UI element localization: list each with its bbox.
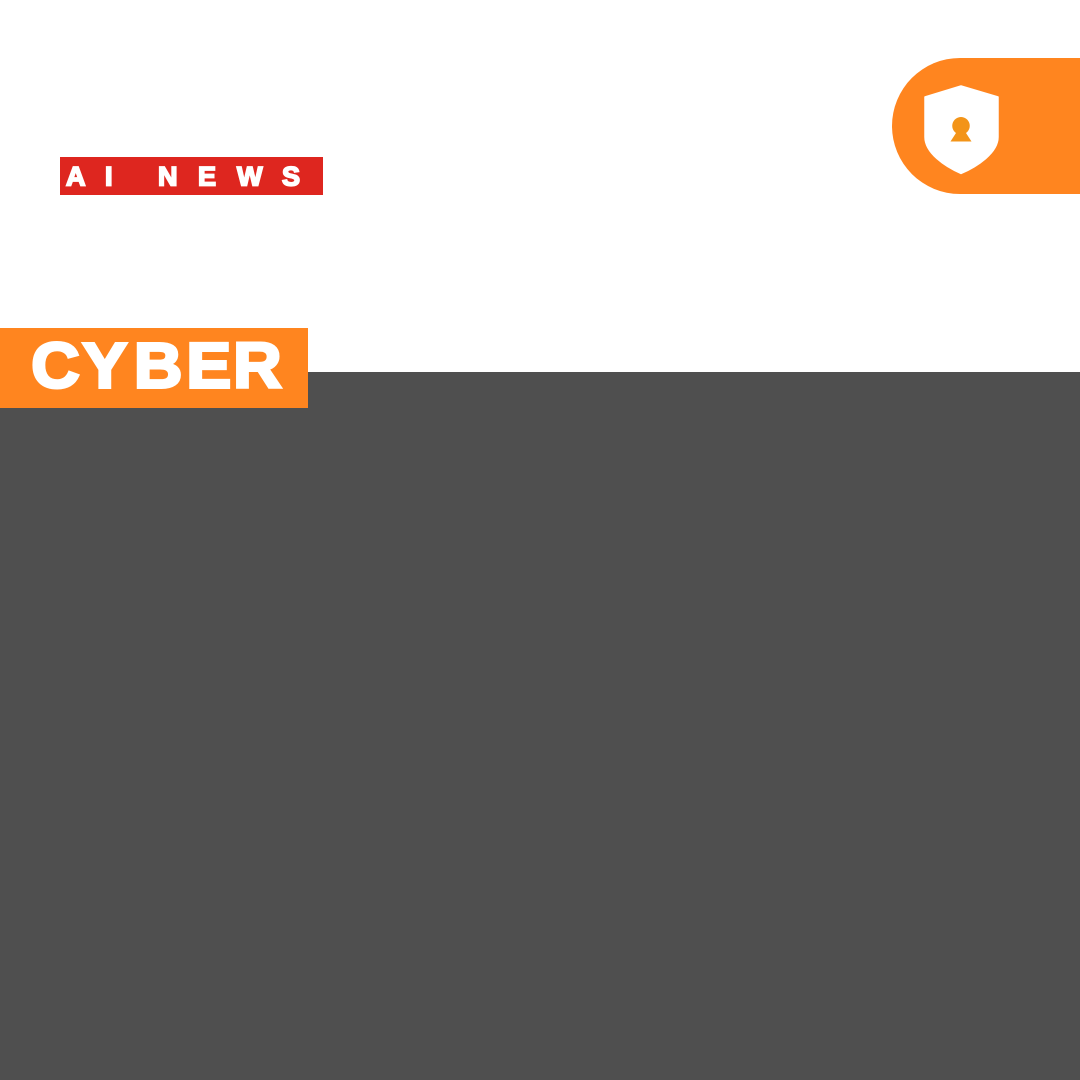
icon: shield badge <box>892 58 1080 194</box>
dark lower panel <box>0 372 1080 1080</box>
badge: AI NEWS: AI NEWS <box>66 162 300 192</box>
heading: CYBER: CYBER <box>31 330 282 401</box>
